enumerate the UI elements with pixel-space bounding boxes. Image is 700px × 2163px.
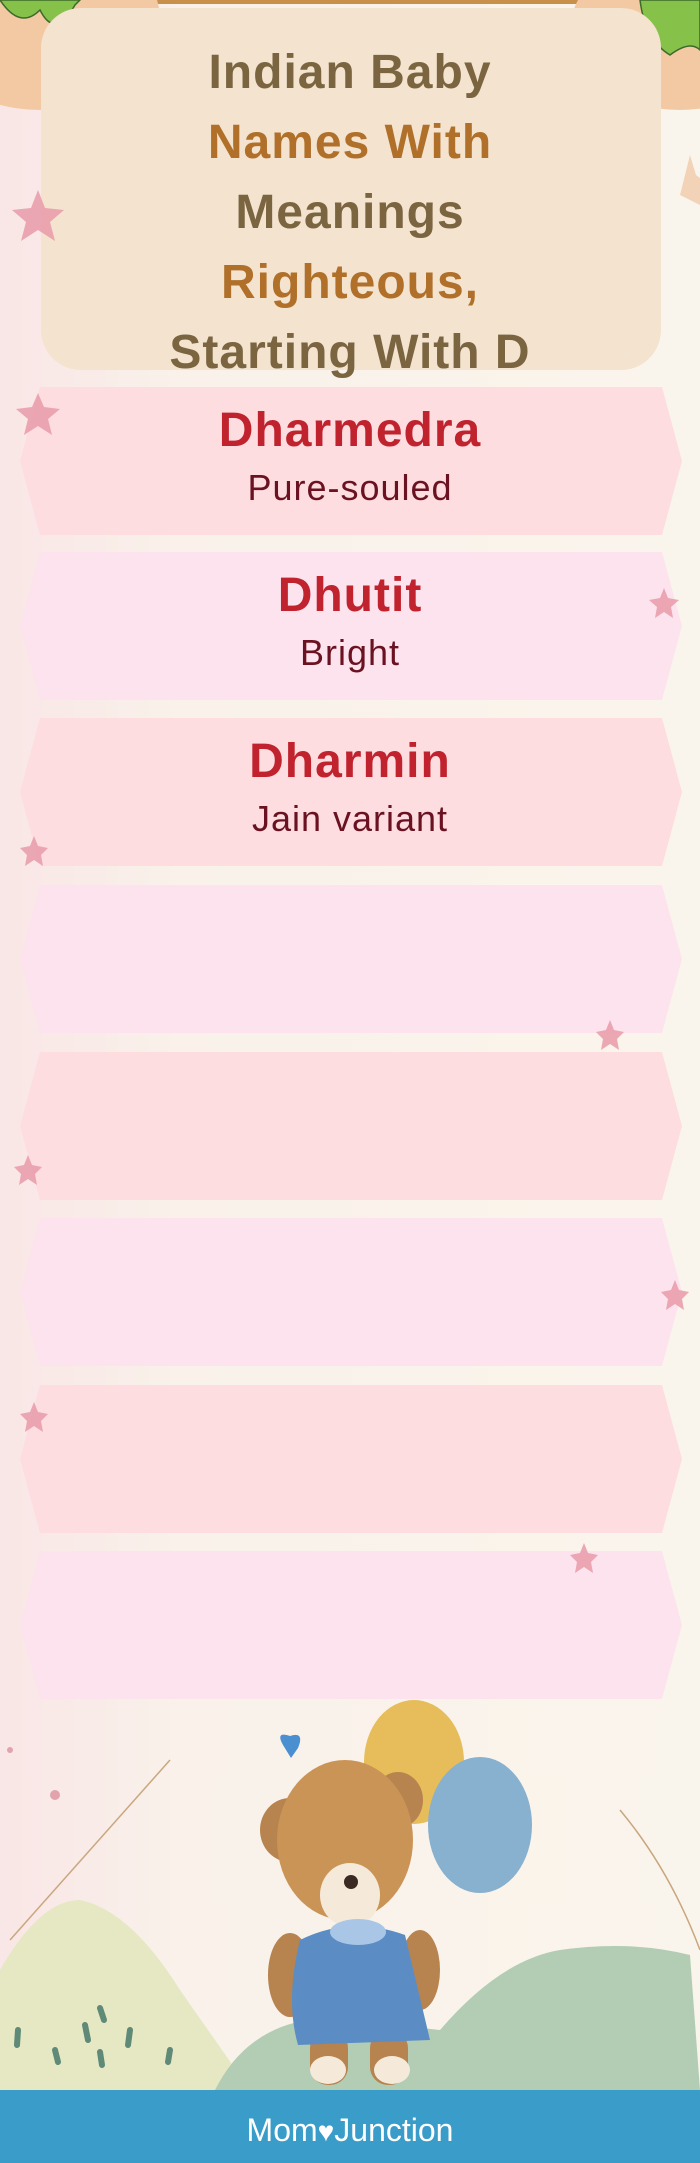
row 3: Dharmin: Dharmin bbox=[249, 735, 451, 788]
balloons bbox=[364, 1700, 464, 1824]
row 8: empty bbox=[80, 1551, 682, 1699]
row 2: Dhutit: Dhutit bbox=[278, 569, 422, 622]
logo: MomJunction: Mom♥Junction bbox=[247, 2112, 453, 2148]
top border strip bbox=[0, 0, 700, 4]
title: Indian Baby bbox=[208, 46, 492, 99]
footer bar bbox=[0, 2090, 700, 2163]
title: Righteous, bbox=[221, 256, 479, 309]
row 1: Dharmedra: Pure-souled bbox=[247, 467, 453, 508]
bear bbox=[260, 1798, 320, 1862]
title panel bbox=[41, 8, 661, 370]
row 2: Dhutit bbox=[80, 552, 682, 700]
row 2: Dhutit: Bright bbox=[300, 632, 400, 673]
row 5: empty bbox=[20, 1052, 682, 1200]
row 1: Dharmedra: Dharmedra bbox=[219, 404, 481, 457]
title: Starting With D bbox=[169, 326, 531, 379]
row 4: empty bbox=[80, 885, 682, 1033]
title: Names With bbox=[208, 116, 492, 169]
row 3: Dharmin: Jain variant bbox=[252, 798, 448, 839]
row 6: empty bbox=[80, 1218, 682, 1366]
illustration: teddy bear with balloons and hills bbox=[0, 1700, 700, 2090]
title bbox=[169, 46, 531, 379]
row 1: Dharmedra bbox=[20, 387, 682, 535]
decoration: top corner blobs bbox=[0, 0, 700, 110]
row 7: empty bbox=[20, 1385, 682, 1533]
row 3: Dharmin bbox=[20, 718, 682, 866]
title: Meanings bbox=[235, 186, 465, 239]
